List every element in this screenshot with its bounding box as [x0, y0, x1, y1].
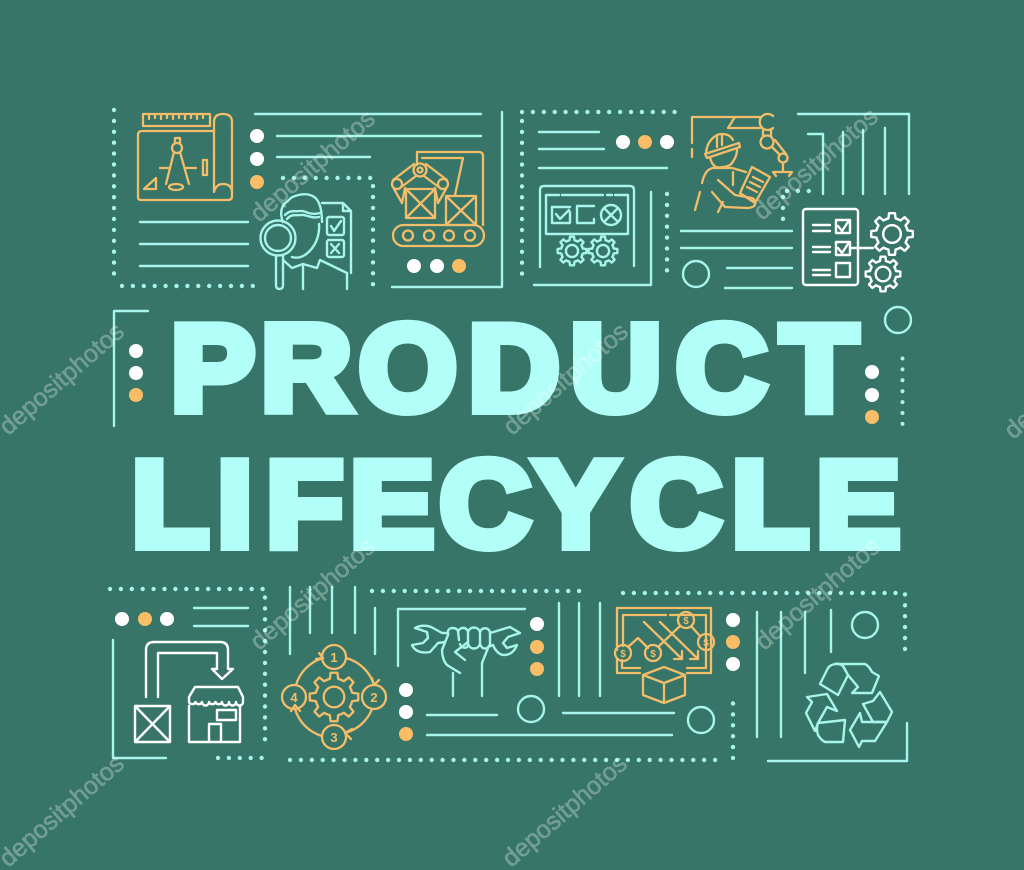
dots: right of money icon — [726, 613, 740, 671]
panel: bottom left launch and growth — [110, 587, 386, 758]
dots: right of fist — [530, 617, 544, 676]
cycle numbers: 4 — [290, 690, 298, 705]
title — [132, 301, 900, 573]
dots: under conveyor — [407, 259, 466, 273]
cycle numbers: 1 — [330, 650, 338, 665]
watermark: depositphotos: depositphotos — [748, 102, 884, 226]
icon: fist holding wrench — [412, 626, 520, 696]
icon: robot arm on conveyor — [392, 152, 484, 246]
panel: bottom right recycling — [623, 593, 907, 761]
watermark: depositphotos: depositphotos — [245, 532, 381, 656]
cycle numbers: 3 — [330, 730, 338, 745]
circle: bottom right — [852, 612, 878, 638]
icon: control panel with gears — [540, 186, 634, 267]
icon: blueprint with compass — [138, 114, 232, 200]
cycle numbers — [290, 650, 378, 745]
title: LIFECYCLE — [132, 437, 900, 573]
icon: numbered cycle with gear — [282, 645, 386, 749]
icon: inspector with magnifying glass — [260, 194, 351, 289]
icon: recycling arrows — [806, 664, 892, 747]
circle: bottom center right — [688, 707, 714, 733]
watermark: depositphotos: depositphotos — [497, 749, 633, 870]
title: PRODUCT — [171, 301, 857, 437]
coin symbols — [620, 616, 709, 660]
watermark: depositphotos: depositphotos — [498, 317, 634, 441]
icon: box delivered to store — [135, 642, 243, 742]
icon: checklist with gears — [803, 209, 913, 291]
circle: bottom center left — [518, 696, 544, 722]
cycle numbers: 2 — [370, 690, 378, 705]
watermark: depositphotos: depositphotos — [750, 532, 886, 656]
panel: bottom center maintenance — [290, 591, 740, 760]
circle: top right — [683, 261, 709, 287]
coin symbols: $ — [703, 638, 709, 649]
coin symbols: $ — [650, 649, 656, 660]
icon: engineer with robot arm — [692, 114, 792, 212]
dots: top left column — [250, 129, 264, 189]
panel: top right testing and quality — [522, 112, 913, 291]
panel: title side right — [865, 307, 911, 424]
panel: title side left — [114, 311, 148, 426]
coin symbols: $ — [620, 649, 626, 660]
coin symbols: $ — [683, 616, 689, 627]
icon: money flow with product box — [615, 608, 714, 703]
dots: top right row — [616, 135, 674, 149]
dots: bottom left row — [115, 612, 174, 626]
watermark: depositphotos: depositphotos — [245, 104, 381, 228]
panel: top left design and prototyping — [114, 110, 502, 289]
dots: bottom center left column — [399, 683, 413, 741]
